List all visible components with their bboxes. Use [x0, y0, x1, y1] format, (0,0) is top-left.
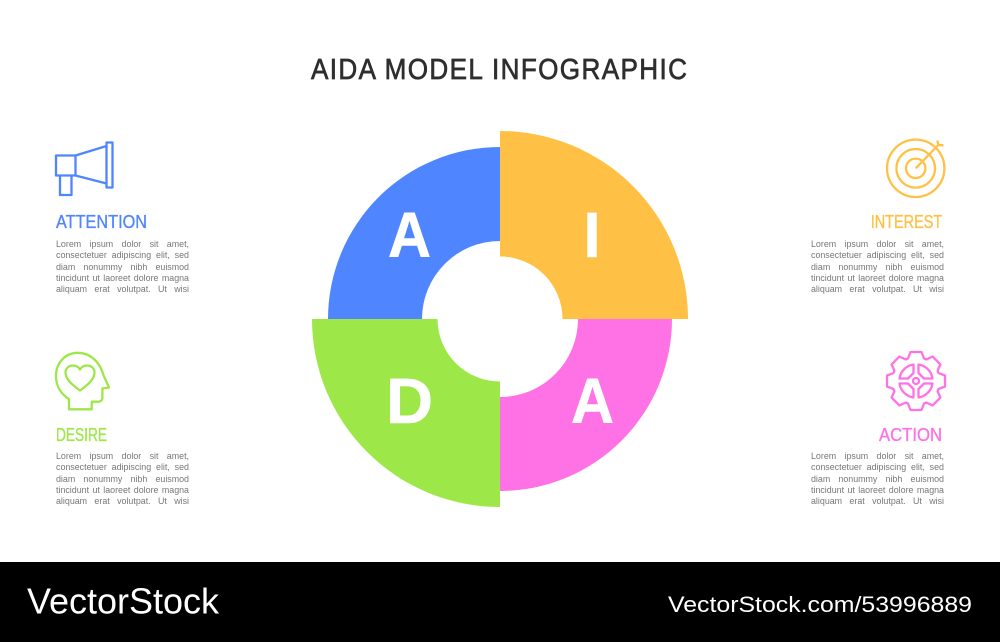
panel: interest — [811, 138, 946, 294]
text block: interest — [811, 239, 944, 294]
letter D: D — [386, 365, 433, 437]
icon: megaphone — [54, 141, 114, 196]
heading: desire: DESIRE — [56, 424, 107, 445]
segment: A (magenta) — [500, 319, 672, 491]
text block: desire: Lorem ipsum dolor sit amet, — [56, 451, 189, 461]
text block: action: aliquam erat volutpat. Ut wisi — [811, 496, 944, 506]
text block: desire: aliquam erat volutpat. Ut wisi — [56, 496, 189, 506]
text block: desire: tincidunt ut laoreet dolore magna — [56, 485, 189, 495]
heading: interest: INTEREST — [871, 211, 942, 232]
icon: target — [886, 138, 946, 198]
text block: attention: tincidunt ut laoreet dolore magna — [56, 273, 189, 283]
text block: desire: consectetuer adipiscing elit, sed — [56, 462, 189, 472]
letter A: A — [571, 365, 614, 437]
text block: desire: diam nonummy nibh euismod — [56, 474, 189, 484]
text block: interest: tincidunt ut laoreet dolore magna — [811, 273, 944, 283]
image id: VectorStock.com/53996889 — [668, 592, 972, 617]
panel: desire — [54, 352, 189, 506]
segment: I (yellow) — [500, 131, 688, 319]
text block: attention: Lorem ipsum dolor sit amet, — [56, 239, 189, 249]
icon: gear — [886, 350, 946, 412]
text block: attention: diam nonummy nibh euismod — [56, 262, 189, 272]
panel: attention — [54, 141, 189, 294]
heading: attention: ATTENTION — [56, 211, 147, 232]
text block: action: consectetuer adipiscing elit, sed — [811, 462, 944, 472]
text block: interest: diam nonummy nibh euismod — [811, 262, 944, 272]
donut chart — [312, 131, 688, 507]
text block: interest: consectetuer adipiscing elit, sed — [811, 250, 944, 260]
letter I: I — [584, 199, 600, 271]
title: AIDA MODEL INFOGRAPHIC — [311, 53, 687, 85]
text block: attention: aliquam erat volutpat. Ut wisi — [56, 284, 189, 294]
segment: D (green) — [312, 319, 500, 507]
text block: desire — [56, 451, 189, 506]
text block: attention — [56, 239, 189, 294]
footer band — [0, 562, 1000, 642]
heading: action: ACTION — [879, 424, 942, 445]
text block: action — [811, 451, 944, 506]
text block: action: Lorem ipsum dolor sit amet, — [811, 451, 944, 461]
segment: A (blue) — [328, 147, 500, 319]
text block: action: tincidunt ut laoreet dolore magna — [811, 485, 944, 495]
letter A: A — [388, 199, 431, 271]
logo: VectorStock: VectorStock — [27, 580, 220, 621]
icon: head with heart — [54, 352, 110, 410]
text block: attention: consectetuer adipiscing elit, sed — [56, 250, 189, 260]
text block: action: diam nonummy nibh euismod — [811, 474, 944, 484]
text block: interest: aliquam erat volutpat. Ut wisi — [811, 284, 944, 294]
panel: action — [811, 350, 946, 506]
text block: interest: Lorem ipsum dolor sit amet, — [811, 239, 944, 249]
